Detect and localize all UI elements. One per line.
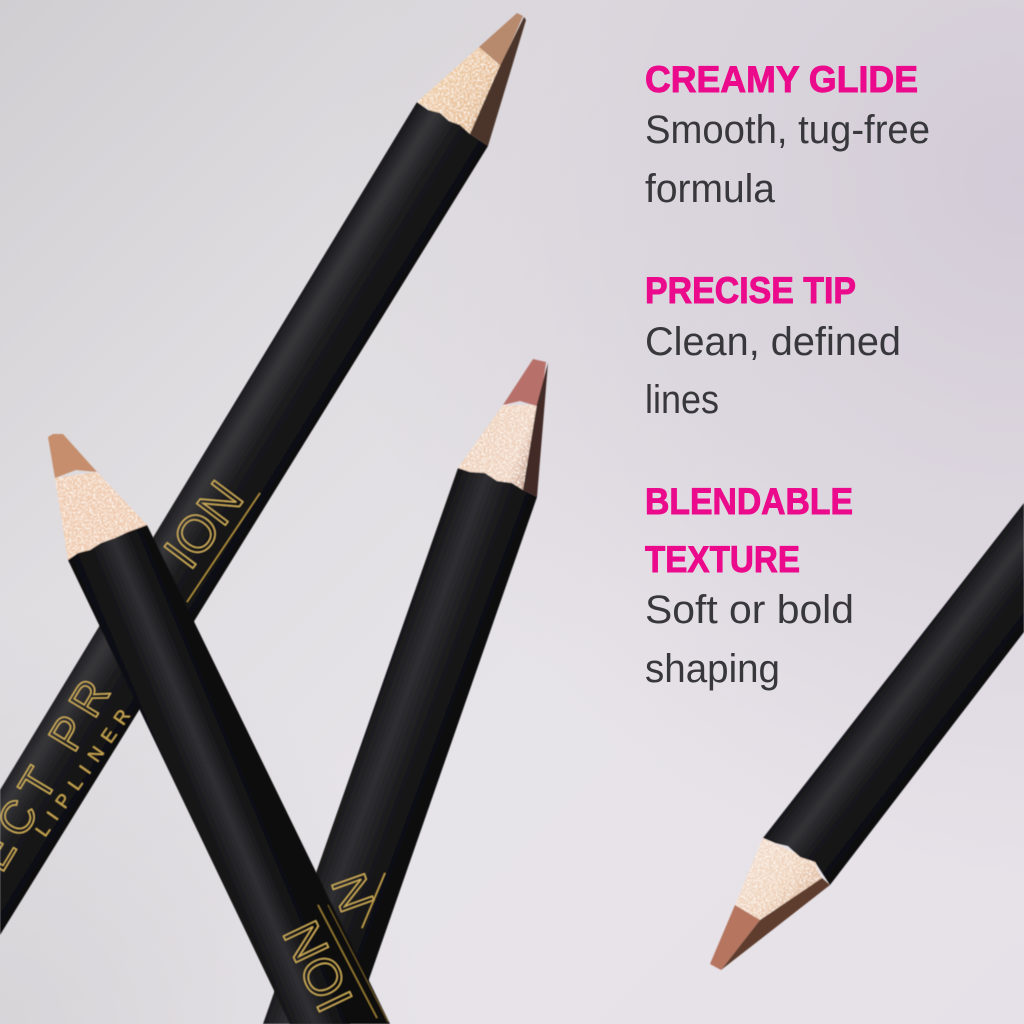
gold imprint: ION (153, 471, 255, 579)
colored tip (503, 359, 546, 407)
feature: blendable texture (645, 481, 854, 691)
colored tip (710, 905, 760, 970)
wood cone (735, 838, 822, 920)
gold imprint (0, 471, 260, 879)
feature: blendable texture: BLENDABLE (645, 481, 853, 522)
feature: precise tip (645, 270, 901, 422)
barrel (68, 525, 390, 1024)
wood cone (55, 472, 147, 560)
pencil: right pencil (710, 503, 1024, 970)
feature: blendable texture: shaping (645, 647, 780, 691)
feature: blendable texture: Soft or bold (645, 588, 854, 632)
shaded cone side (470, 17, 526, 146)
gold imprint: ION (272, 912, 365, 1020)
feature: precise tip: Clean, defined (645, 320, 901, 364)
barrel (263, 468, 537, 1024)
feature: blendable texture: TEXTURE (645, 539, 800, 580)
feature: precise tip: PRECISE TIP (645, 270, 856, 311)
colored tip (479, 13, 523, 66)
feature: creamy glide (645, 59, 930, 211)
barrel (763, 503, 1024, 885)
gold imprint: LIPLINER (32, 706, 135, 841)
pencil: middle pencil (263, 359, 548, 1024)
feature: precise tip: lines (645, 378, 719, 422)
pencil: front crossing pencil (48, 434, 390, 1024)
gold imprint (330, 872, 386, 929)
feature: creamy glide: formula (645, 167, 776, 211)
shaded cone side (523, 363, 548, 497)
wood cone (417, 47, 501, 136)
pencil: long back pencil (0, 13, 526, 935)
gold imprint: N (321, 866, 386, 919)
shaded cone side (721, 878, 830, 970)
colored tip (48, 434, 97, 478)
feature: creamy glide: CREAMY GLIDE (645, 59, 918, 100)
feature list (645, 59, 930, 691)
wood cone (458, 405, 537, 490)
barrel (0, 102, 488, 935)
feature: creamy glide: Smooth, tug-free (645, 108, 930, 152)
